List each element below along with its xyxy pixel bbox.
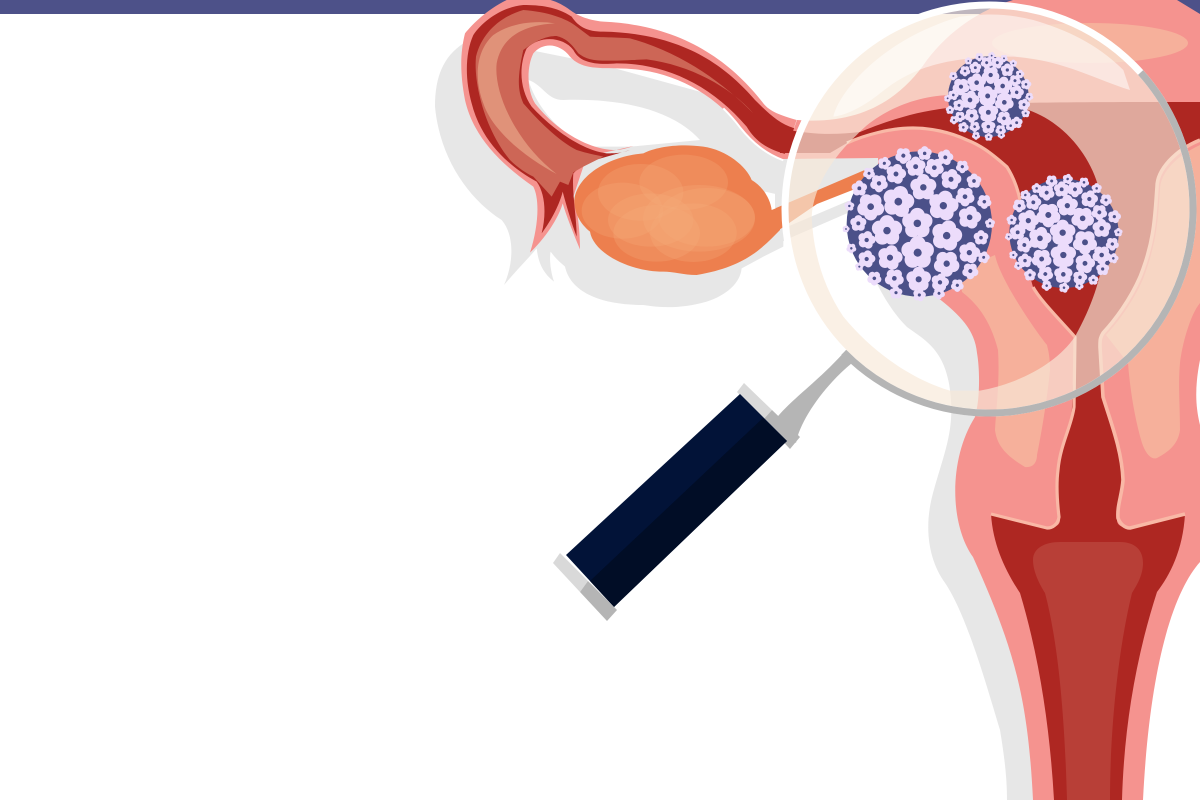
handle top collar xyxy=(737,383,772,420)
virus particles xyxy=(842,51,1123,302)
top header bar xyxy=(0,0,1200,14)
magnifier neck xyxy=(775,350,852,443)
magnifier handle xyxy=(553,383,800,621)
tube highlight xyxy=(478,22,557,174)
uterus outer wall xyxy=(783,0,1200,800)
right cervix stripe xyxy=(1100,140,1200,528)
right wall inner tissue xyxy=(1106,145,1200,458)
left wall inner tissue xyxy=(960,255,1050,467)
lens gloss highlight xyxy=(833,14,1130,117)
tube dark lining xyxy=(467,5,795,237)
vaginal canal inner xyxy=(1033,542,1143,800)
virus: top xyxy=(943,51,1035,141)
fundus highlight xyxy=(992,23,1188,63)
lens tinted rim xyxy=(788,8,1190,410)
tube inner channel xyxy=(476,10,753,197)
ovary inner lobes xyxy=(582,155,755,262)
ligament shadow upper xyxy=(775,150,885,215)
uterine cavity and cervical canal xyxy=(780,102,1200,520)
virus: large left xyxy=(842,144,995,302)
ligament shadow band xyxy=(775,201,850,245)
handle grip xyxy=(566,394,787,607)
tube outer wall xyxy=(461,0,797,253)
left cervix stripe xyxy=(847,128,1075,528)
lens ring white xyxy=(785,5,1193,413)
magnifying glass lens xyxy=(788,8,1190,410)
tube and ovary drop shadow xyxy=(435,43,783,307)
right edge gap xyxy=(1196,360,1200,425)
ovarian ligament xyxy=(776,169,878,232)
fallopian tube xyxy=(461,0,797,253)
uterus drop shadow xyxy=(875,200,1060,800)
virus: right xyxy=(1004,173,1123,293)
vaginal canal dark wall xyxy=(991,514,1185,800)
ovary body xyxy=(574,145,780,275)
ovary xyxy=(574,145,780,275)
handle bottom collar xyxy=(553,553,588,592)
lens ring grey xyxy=(844,72,1193,413)
uterus xyxy=(780,0,1200,800)
